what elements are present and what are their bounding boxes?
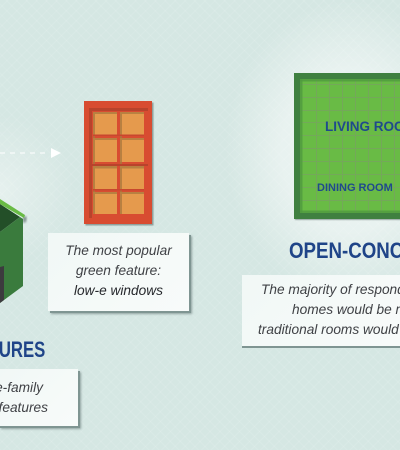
room label: dining room: DINING ROOM — [317, 182, 393, 194]
caption text line: first: The most popular — [65, 243, 172, 258]
icon: red low-e window — [84, 101, 152, 224]
panel: open-concept caption — [242, 275, 400, 348]
panel: window caption — [48, 233, 194, 316]
floor plan: open-concept room — [294, 73, 400, 219]
panel: green features caption — [0, 369, 82, 430]
icon: green house — [0, 199, 28, 303]
caption text line: third: low-e windows — [74, 283, 163, 298]
arrow: dashed pointer to window — [0, 148, 61, 158]
floor grid — [300, 79, 400, 213]
caption text line: second: green feature: — [76, 263, 161, 278]
